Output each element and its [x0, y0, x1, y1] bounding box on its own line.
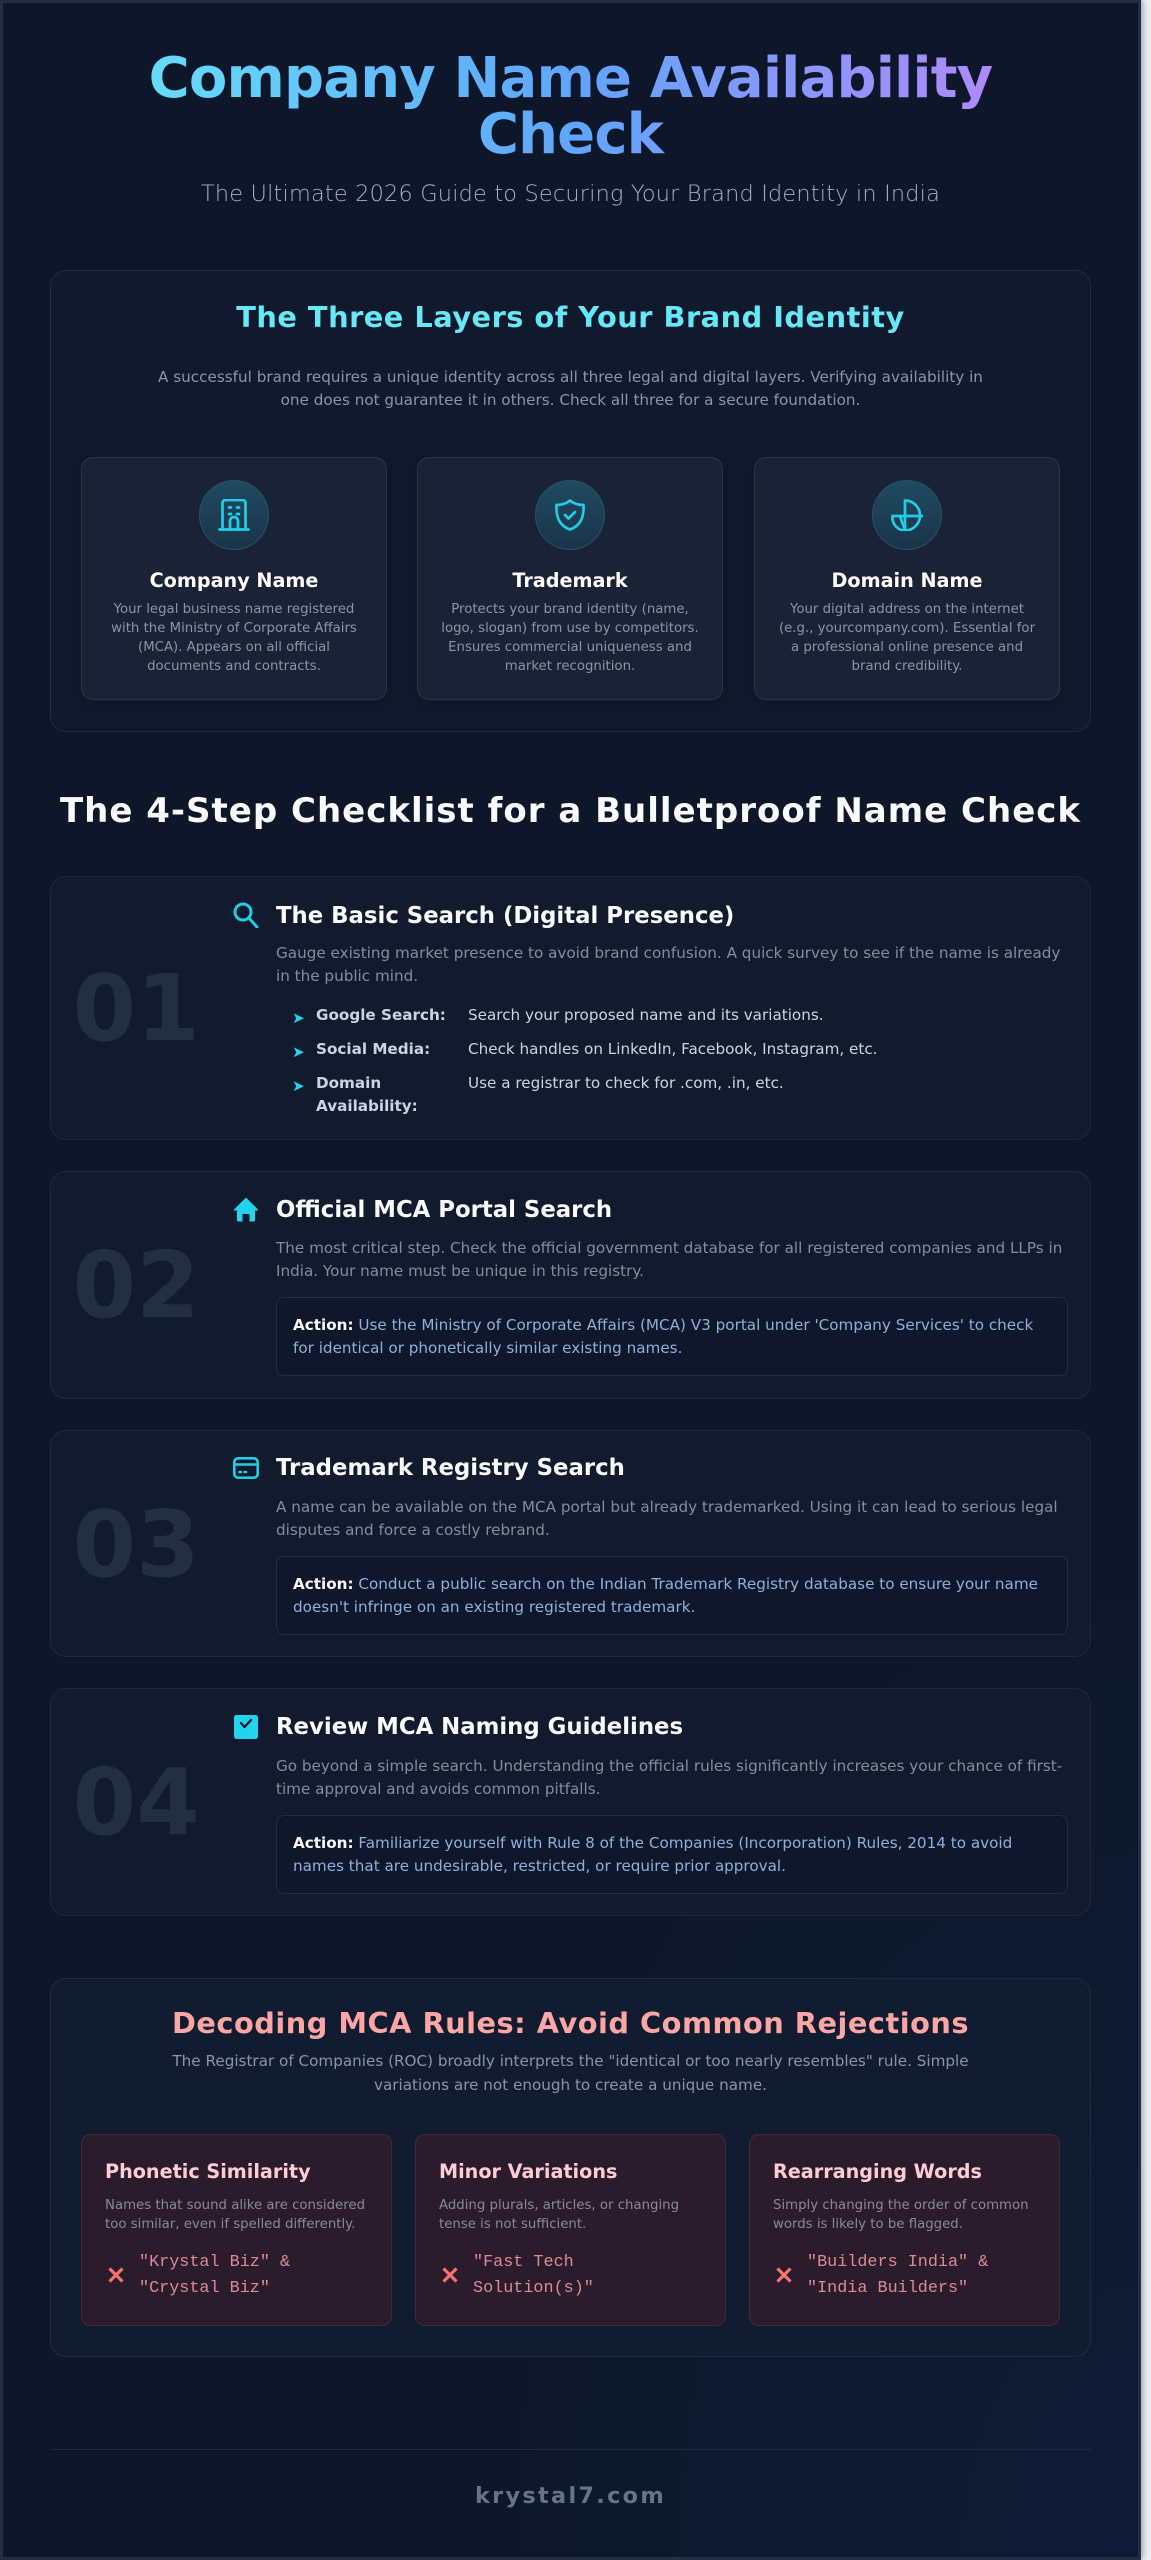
rule card: minor variations [415, 2134, 726, 2326]
rule description [105, 2198, 365, 2232]
card description: a professional online presence and [791, 640, 1023, 655]
step description: time approval and avoids common pitfalls. [276, 1780, 600, 1798]
action box [276, 1297, 1068, 1376]
title [50, 50, 1091, 162]
card description: documents and contracts. [147, 659, 321, 674]
bullet label: Domain [316, 1074, 381, 1092]
bullet label: Google Search: [316, 1006, 446, 1024]
rejected example [807, 2252, 988, 2298]
card description [441, 602, 699, 674]
bullet label: Social Media: [316, 1040, 430, 1058]
subtitle: The Ultimate 2026 Guide to Securing Your Brand Identity in India [201, 180, 940, 206]
rule title: Phonetic Similarity [105, 2160, 311, 2183]
card title: Company Name [150, 568, 318, 592]
card: company name [81, 457, 387, 700]
card description: Protects your brand identity (name, [451, 602, 689, 617]
action text: doesn't infringe on an existing registered trademark. [293, 1598, 695, 1616]
step number: 03 [72, 1491, 200, 1598]
card description [111, 602, 357, 674]
step description [276, 1498, 1058, 1539]
step number: 01 [72, 955, 200, 1062]
card description: with the Ministry of Corporate Affairs [111, 621, 357, 636]
arrow bullet: ➤ [292, 1043, 305, 1061]
step description [276, 944, 1060, 985]
action text [293, 1574, 1038, 1616]
card description: Your legal business name registered [114, 602, 354, 617]
rule description: Names that sound alike are considered [105, 2198, 365, 2212]
step 1 panel [50, 876, 1091, 1140]
card description: brand credibility. [852, 659, 962, 674]
card description: Ensures commercial uniqueness and [448, 640, 692, 655]
step title: The Basic Search (Digital Presence) [276, 903, 734, 929]
title: Check [478, 102, 663, 166]
intro text [158, 368, 983, 409]
rejected example: "Builders India" & [807, 2252, 988, 2272]
step description [276, 1239, 1062, 1280]
step 3 panel [50, 1430, 1091, 1657]
rule description: tense is not sufficient. [439, 2216, 586, 2232]
action text [293, 1316, 1034, 1356]
card description [779, 602, 1036, 674]
bullet label [316, 1074, 418, 1114]
intro text: A successful brand requires a unique identity across all three legal and digital layers. Verifying availability in [158, 368, 983, 386]
rule description [773, 2198, 1029, 2232]
rule title: Rearranging Words [773, 2160, 982, 2183]
panel: three layers of brand identity [50, 270, 1091, 732]
icon: cross [776, 2267, 792, 2283]
step description: disputes and force a costly rebrand. [276, 1521, 550, 1539]
step title: Review MCA Naming Guidelines [276, 1714, 683, 1740]
bullet text: Use a registrar to check for .com, .in, etc. [468, 1074, 784, 1092]
icon: cross [108, 2267, 124, 2283]
step number: 04 [72, 1749, 200, 1856]
step number: 02 [72, 1232, 200, 1339]
rejected example: "Fast Tech [473, 2252, 574, 2272]
intro text: The Registrar of Companies (ROC) broadly interprets the "identical or too nearly resembles" rule. Simple [172, 2052, 969, 2070]
rule card: phonetic similarity [81, 2134, 392, 2326]
rule description: words is likely to be flagged. [773, 2216, 963, 2232]
arrow bullet: ➤ [292, 1009, 305, 1027]
icon: magnifier [234, 902, 259, 928]
heading: three layers: The Three Layers of Your Brand Identity [236, 300, 905, 334]
card description: (e.g., yourcompany.com). Essential for [779, 621, 1035, 636]
bullet text: Search your proposed name and its variations. [468, 1006, 824, 1024]
heading: 4-step checklist: The 4-Step Checklist for a Bulletproof Name Check [60, 791, 1081, 831]
intro text: one does not guarantee it in others. Check all three for a secure foundation. [281, 391, 860, 409]
card description: logo, slogan) from use by competitors. [441, 621, 699, 636]
card title: Domain Name [832, 568, 982, 592]
intro text: variations are not enough to create a unique name. [374, 2076, 767, 2094]
card: trademark [417, 457, 723, 700]
rule description [439, 2198, 679, 2232]
rejected example: Solution(s)" [473, 2279, 594, 2298]
step description: Gauge existing market presence to avoid brand confusion. A quick survey to see if the name is already [276, 944, 1060, 962]
action box [276, 1815, 1068, 1894]
action text: Action: Familiarize yourself with Rule 8 of the Companies (Incorporation) Rules, 2014 to avoid [293, 1834, 1012, 1852]
action text: names that are undesirable, restricted, or require prior approval. [293, 1856, 786, 1874]
card description: Your digital address on the internet [790, 602, 1024, 617]
rule title: Minor Variations [439, 2160, 617, 2183]
arrow bullet: ➤ [292, 1077, 305, 1095]
action box [276, 1556, 1068, 1635]
step description [276, 1756, 1062, 1798]
rejected example [139, 2252, 290, 2298]
icon: id card [233, 1457, 259, 1479]
action text: Action: Use the Ministry of Corporate Affairs (MCA) V3 portal under 'Company Services' to check [293, 1316, 1033, 1334]
icon: home [234, 1198, 258, 1222]
rule description: too similar, even if spelled differently. [105, 2216, 355, 2232]
heading: decoding rules: Decoding MCA Rules: Avoid Common Rejections [172, 2006, 969, 2040]
action text: Action: Conduct a public search on the Indian Trademark Registry database to ensure your name [293, 1574, 1038, 1592]
step description: A name can be available on the MCA portal but already trademarked. Using it can lead to serious legal [276, 1498, 1058, 1516]
rejected example [473, 2252, 594, 2298]
intro text [172, 2052, 969, 2094]
rejected example: "Krystal Biz" & [139, 2252, 290, 2272]
bullet label: Availability: [316, 1096, 418, 1114]
step description: India. Your name must be unique in this registry. [276, 1262, 644, 1280]
action text [293, 1834, 1012, 1874]
icon: cross [442, 2267, 458, 2283]
title: Company Name Availability [149, 46, 992, 110]
step 4 panel [50, 1688, 1091, 1916]
card: domain name [754, 457, 1060, 700]
step description: Go beyond a simple search. Understanding the official rules significantly increases your chance of first- [276, 1756, 1062, 1774]
footer: site name: krystal7.com [475, 2483, 666, 2509]
bullet text: Check handles on LinkedIn, Facebook, Instagram, etc. [468, 1040, 878, 1058]
card description: (MCA). Appears on all official [138, 640, 330, 655]
card title: Trademark [512, 568, 628, 592]
card description: market recognition. [505, 659, 635, 674]
step title: Official MCA Portal Search [276, 1197, 612, 1223]
step title: Trademark Registry Search [276, 1455, 625, 1481]
rule description: Simply changing the order of common [773, 2198, 1029, 2212]
rejected example: "Crystal Biz" [139, 2279, 270, 2298]
action text: for identical or phonetically similar existing names. [293, 1338, 682, 1356]
rejected example: "India Builders" [807, 2279, 968, 2298]
icon: building [199, 480, 269, 550]
icon: check clipboard [234, 1715, 258, 1739]
step 2 panel [50, 1171, 1091, 1399]
icon: shield check [535, 480, 605, 550]
icon: domain quadrant globe [872, 480, 942, 550]
rule description: Adding plurals, articles, or changing [439, 2198, 679, 2212]
rule card: rearranging words [749, 2134, 1060, 2326]
step description: The most critical step. Check the official government database for all registered companies and LLPs in [276, 1239, 1062, 1257]
panel: decoding MCA rules [50, 1978, 1091, 2357]
step description: in the public mind. [276, 967, 418, 985]
